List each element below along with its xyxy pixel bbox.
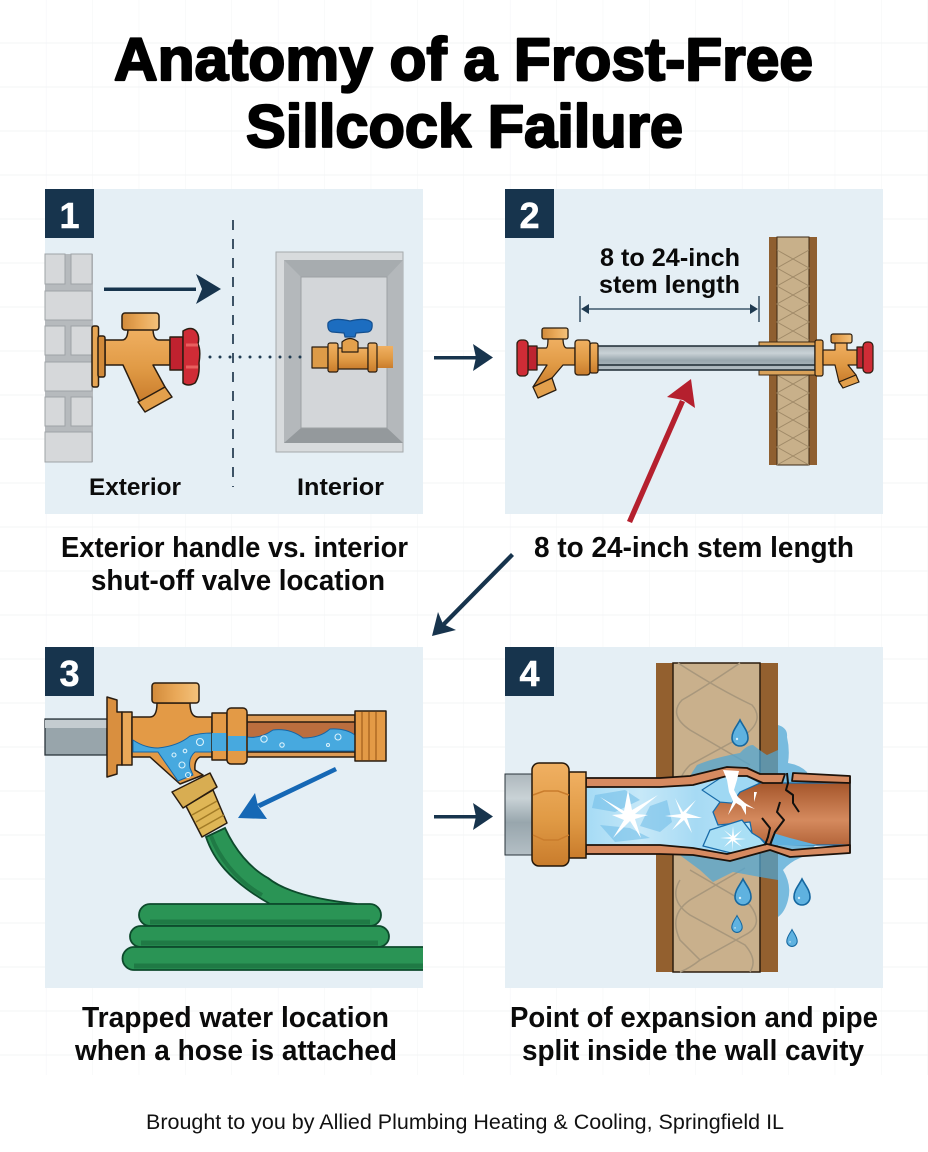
interior shut-off valve xyxy=(312,319,393,372)
title: Sillcock Failure xyxy=(246,93,683,160)
title: Anatomy of a Frost-Free xyxy=(114,26,813,93)
dotted line xyxy=(210,356,310,358)
footer: Brought to you by Allied Plumbing Heating & Cooling, Springfield IL xyxy=(146,1110,784,1134)
panel 1: exterior vs interior xyxy=(45,189,423,514)
caption 1 xyxy=(61,532,408,597)
caption 4 xyxy=(510,1002,878,1067)
caption 4: Point of expansion and pipe xyxy=(510,1002,878,1034)
badge 2: 2 xyxy=(519,195,540,236)
caption 1: Exterior handle vs. interior xyxy=(61,532,408,564)
white fracture xyxy=(723,770,757,815)
left faucet xyxy=(517,328,598,398)
badge 4 xyxy=(505,647,554,696)
right faucet xyxy=(815,334,873,388)
flow arrow 3 to 4 xyxy=(434,803,493,830)
caption 3: Trapped water location xyxy=(82,1002,389,1034)
hose fitting xyxy=(186,790,227,837)
badge 3 xyxy=(45,647,94,696)
label: stem length: 8 to 24-inch xyxy=(600,244,740,272)
arrow: red pointer xyxy=(627,379,695,523)
leaking water xyxy=(676,725,817,917)
arrow: blue pointer xyxy=(238,767,337,819)
flow arrow 1 to 2 xyxy=(434,344,493,371)
label: interior: Interior xyxy=(297,474,384,501)
panel 3: trapped water xyxy=(45,647,423,988)
frozen pipe xyxy=(586,767,850,861)
flow arrow 2 to 3 xyxy=(432,553,514,636)
caption 1: shut-off valve location xyxy=(91,565,385,597)
badge 4: 4 xyxy=(519,653,540,694)
label: stem length xyxy=(599,244,740,299)
recessed wall box xyxy=(276,252,403,452)
faucet: exterior handle xyxy=(92,313,200,412)
brass coupling xyxy=(532,763,586,866)
hose coil xyxy=(122,828,423,970)
wall section xyxy=(769,237,817,465)
caption 3: when a hose is attached xyxy=(74,1035,397,1067)
dashed divider xyxy=(232,220,234,487)
dimension line xyxy=(580,296,759,322)
sillcock body with trapped water xyxy=(107,683,386,808)
ice crystals xyxy=(600,790,746,851)
label: exterior: Exterior xyxy=(89,474,181,501)
stem pipe xyxy=(597,342,817,375)
panel 4: pipe split xyxy=(505,647,883,988)
water drops xyxy=(732,720,810,946)
badge 3: 3 xyxy=(59,653,80,694)
label: stem length: stem length xyxy=(599,271,740,299)
gray pipe section xyxy=(505,774,533,855)
caption 3 xyxy=(74,1002,397,1067)
badge 1 xyxy=(45,189,94,238)
arrow: direction xyxy=(104,274,221,304)
water bubbles xyxy=(172,734,341,778)
badge 2 xyxy=(505,189,554,238)
panel 2: stem length xyxy=(505,189,883,514)
brick wall xyxy=(45,254,93,462)
title xyxy=(114,26,813,160)
caption 2: 8 to 24-inch stem length xyxy=(534,532,854,564)
cracks xyxy=(762,773,799,845)
wall cavity xyxy=(656,663,778,972)
gray supply pipe xyxy=(45,719,107,755)
caption 4: split inside the wall cavity xyxy=(522,1035,864,1067)
badge 1: 1 xyxy=(59,195,80,236)
